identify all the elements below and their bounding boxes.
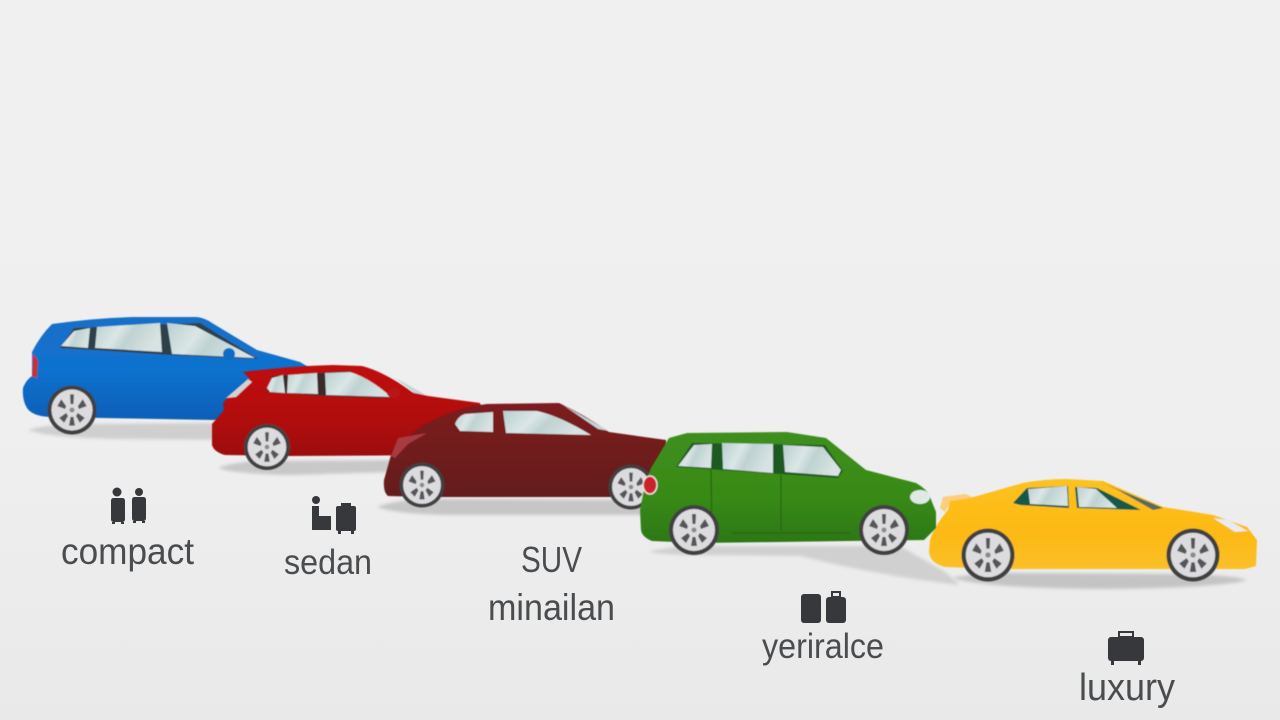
red rear window	[226, 379, 252, 398]
ground shadow: luxury	[952, 573, 1247, 589]
label: minailan: minailan	[488, 587, 615, 628]
green tail light	[643, 476, 657, 494]
label: SUV: SUV	[521, 539, 582, 580]
red wheel	[244, 424, 290, 470]
yellow headlight	[1213, 518, 1248, 532]
label: sedan: sedan	[284, 543, 372, 582]
yellow body	[929, 479, 1257, 569]
maroon tail light	[391, 433, 427, 458]
maroon body	[384, 403, 668, 497]
car: maroon SUV	[384, 403, 668, 510]
label: luxury: luxury	[1079, 667, 1175, 709]
car: blue compact	[23, 317, 310, 434]
ground shadow: minivan	[648, 546, 960, 585]
yellow spoiler	[940, 494, 975, 512]
maroon windows	[455, 405, 609, 435]
green rear wheel	[669, 505, 719, 555]
green windows	[676, 443, 843, 478]
car: yellow luxury	[929, 479, 1257, 582]
red windows	[267, 371, 426, 398]
luggage icon: sedan	[312, 496, 356, 534]
green body	[640, 432, 936, 543]
yellow front wheel	[1166, 528, 1220, 582]
green headlight	[910, 490, 930, 504]
yellow rear wheel	[962, 528, 1014, 582]
red body	[212, 365, 490, 456]
blue body	[23, 317, 310, 420]
green door line	[711, 470, 850, 535]
blue windows	[60, 323, 258, 359]
blue tail light	[32, 354, 38, 378]
luggage icon: luxury	[1108, 632, 1144, 665]
blue mirror	[223, 348, 235, 360]
luggage icon: compact	[111, 488, 146, 524]
green front wheel	[859, 505, 909, 555]
car: green minivan	[640, 432, 936, 555]
luggage icon: yeriralce	[801, 592, 846, 623]
car: red sedan	[212, 365, 490, 470]
label: compact: compact	[61, 531, 195, 572]
ground shadow: sedan	[218, 460, 395, 475]
ground shadow: SUV	[377, 499, 650, 515]
red mirror	[387, 388, 401, 398]
yellow windows	[1013, 483, 1163, 510]
label: yeriralce: yeriralce	[762, 627, 884, 666]
maroon front wheel	[608, 464, 654, 510]
ground shadow: compact	[28, 423, 225, 440]
maroon rear wheel	[400, 462, 444, 508]
blue wheel	[48, 386, 96, 434]
